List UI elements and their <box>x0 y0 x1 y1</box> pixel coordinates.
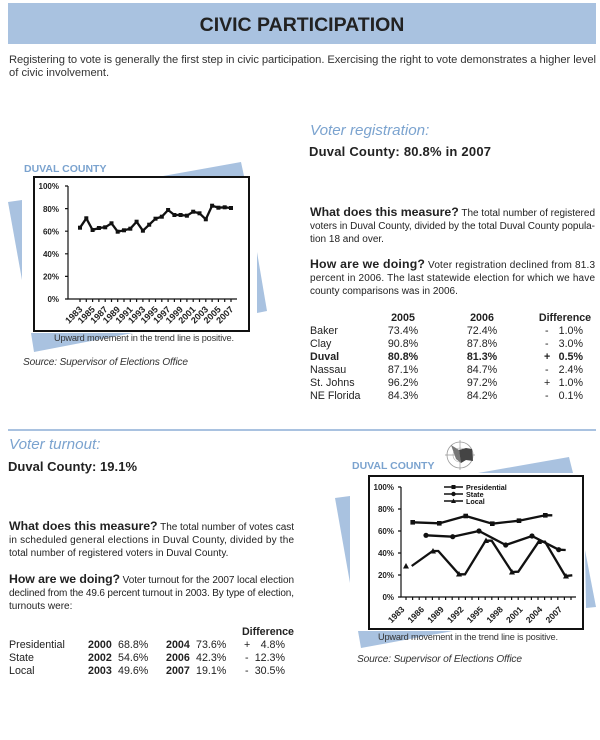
what does this measure <box>9 519 294 559</box>
y axis labels: 60% <box>378 527 394 536</box>
x axis labels: 1997 <box>151 304 173 326</box>
y axis labels: 60% <box>43 228 59 236</box>
registration comparison table: 1.0% <box>559 325 583 337</box>
x axis labels: 1983 <box>386 604 407 625</box>
registration comparison table: 96.2% <box>388 377 419 389</box>
title banner <box>8 3 596 44</box>
registration comparison table: 87.1% <box>388 364 419 376</box>
registration comparison table: 81.3% <box>467 351 498 363</box>
y axis labels: 0% <box>47 295 59 304</box>
registration comparison table: 1.0% <box>559 377 583 389</box>
x axis labels: 2007 <box>543 604 564 625</box>
registration comparison table: 73.4% <box>388 325 419 337</box>
x axis labels <box>63 304 235 326</box>
how are we doing: percent in 2006. The last statewide election for which we have <box>310 273 595 284</box>
title banner: CIVIC PARTICIPATION <box>200 14 404 36</box>
turnout table: 2007 <box>166 665 190 677</box>
chart frame <box>369 476 583 629</box>
registration comparison table: St. Johns <box>310 377 355 389</box>
turnout table: Local <box>9 665 35 677</box>
turnout table: Presidential <box>9 639 65 651</box>
panel: voter turnout text <box>8 436 294 677</box>
registration comparison table: - <box>545 364 549 376</box>
turnout table <box>9 626 294 677</box>
turnout table: 12.3% <box>255 652 285 664</box>
section heading: Voter registration: <box>310 122 429 139</box>
x axis labels: 1986 <box>406 604 426 625</box>
y axis labels: 40% <box>43 250 59 259</box>
turnout table: 54.6% <box>118 652 149 664</box>
registration comparison table: 2005 <box>391 312 415 324</box>
how are we doing: turnouts were: <box>9 601 72 612</box>
chart source: Source: Supervisor of Elections Office <box>23 357 188 368</box>
turnout table: Difference <box>242 626 294 638</box>
turnout table: 68.8% <box>118 639 149 651</box>
turnout table: 2003 <box>88 665 112 677</box>
x axis labels <box>386 604 564 625</box>
turnout table: State <box>9 652 34 664</box>
registration comparison table: 87.8% <box>467 338 498 350</box>
turnout table: 2004 <box>166 639 190 651</box>
registration comparison table: Nassau <box>310 364 346 376</box>
registration comparison table: NE Florida <box>310 390 361 402</box>
registration comparison table: 84.2% <box>467 390 498 402</box>
x axis labels: 2004 <box>524 604 544 625</box>
key figure: Duval County: 19.1% <box>8 459 137 474</box>
local line <box>403 538 572 578</box>
introduction text: of civic involvement. <box>9 67 109 79</box>
y axis labels <box>39 182 59 304</box>
x axis labels: 2005 <box>202 304 223 326</box>
axes <box>398 487 576 600</box>
axes <box>65 186 237 302</box>
panel: voter turnout chart <box>335 440 596 665</box>
key figure: Duval County: 80.8% in 2007 <box>309 144 491 159</box>
x axis labels: 2001 <box>176 304 198 326</box>
registration comparison table: 90.8% <box>388 338 419 350</box>
registration comparison table: - <box>545 325 549 337</box>
state line <box>423 528 566 552</box>
chart caption: Upward movement in the trend line is positive. <box>54 333 234 343</box>
panel: voter registration chart <box>8 162 267 368</box>
how are we doing: county comparisons was in 2006. <box>310 286 458 297</box>
y axis labels: 100% <box>39 182 59 191</box>
turnout table: 2006 <box>166 652 190 664</box>
registration comparison table: 2.4% <box>559 364 583 376</box>
how are we doing: How are we doing? Voter registration declined from 81.3 <box>310 257 595 271</box>
y axis labels: 80% <box>43 205 59 214</box>
what does this measure: What does this measure? The total number of votes cast <box>9 519 294 533</box>
registration comparison table: 0.5% <box>559 351 583 363</box>
legend: State <box>466 490 484 499</box>
x axis labels: 1992 <box>445 604 466 625</box>
registration comparison table: + <box>544 377 550 389</box>
x axis labels: 2007 <box>214 304 235 326</box>
legend <box>444 483 507 506</box>
registration comparison table: 97.2% <box>467 377 498 389</box>
x axis labels: 1991 <box>113 304 135 326</box>
registration comparison table: Duval <box>310 351 339 363</box>
y axis labels: 0% <box>382 593 394 602</box>
registration comparison table: Clay <box>310 338 332 350</box>
turnout table: 49.6% <box>118 665 149 677</box>
x axis labels: 1995 <box>465 604 485 625</box>
registration comparison table: 80.8% <box>388 351 419 363</box>
registration comparison table: + <box>544 351 550 363</box>
turnout table: + <box>244 639 250 651</box>
registration comparison table: 84.3% <box>388 390 419 402</box>
what does this measure: total number of registered voters in Duval County. <box>9 548 228 559</box>
registration comparison table: Baker <box>310 325 338 337</box>
chart heading: DUVAL COUNTY <box>352 460 434 472</box>
what does this measure: voters in Duval County, divided by the total Duval County popula- <box>310 221 595 232</box>
x axis labels: 1993 <box>126 304 147 326</box>
what does this measure: What does this measure? The total number of registered <box>310 205 595 219</box>
introduction text <box>9 54 596 79</box>
registration comparison table: 72.4% <box>467 325 498 337</box>
registration comparison table <box>310 312 591 402</box>
presidential line <box>410 513 552 526</box>
turnout table: - <box>245 652 249 664</box>
turnout table: 73.6% <box>196 639 227 651</box>
what does this measure: tion 18 and over. <box>310 234 384 245</box>
icon: flag on compass <box>445 440 475 470</box>
how are we doing <box>310 257 595 297</box>
x axis labels: 1989 <box>425 604 446 625</box>
registration comparison table: - <box>545 338 549 350</box>
how are we doing: How are we doing? Voter turnout for the 2007 local election <box>9 572 294 586</box>
x axis labels: 2001 <box>504 604 525 625</box>
turnout table: 4.8% <box>261 639 285 651</box>
introduction text: Registering to vote is generally the first step in civic participation. Exercising the right to vote demonstrates a higher level <box>9 54 596 66</box>
registration comparison table: 84.7% <box>467 364 498 376</box>
how are we doing: declined from the 49.6 percent turnout in 2003. By type of election, <box>9 588 294 599</box>
turnout table: 19.1% <box>196 665 227 677</box>
registration comparison table: 3.0% <box>559 338 583 350</box>
y axis labels: 20% <box>43 272 59 282</box>
x axis labels: 1983 <box>63 304 84 326</box>
registration comparison table: 2006 <box>470 312 494 324</box>
what does this measure: in scheduled general elections in Duval County, divided by the <box>9 535 294 546</box>
y axis labels: 100% <box>374 483 394 492</box>
registration comparison table: - <box>545 390 549 402</box>
x axis labels: 1989 <box>101 304 122 326</box>
x axis labels: 1987 <box>88 304 110 326</box>
y axis labels <box>374 483 394 602</box>
what does this measure <box>310 205 595 245</box>
turnout table: 30.5% <box>255 665 285 677</box>
chart source: Source: Supervisor of Elections Office <box>357 654 522 665</box>
chart caption: Upward movement in the trend line is positive. <box>378 632 558 642</box>
chart frame <box>34 177 249 331</box>
turnout table: 42.3% <box>196 652 227 664</box>
chart heading: DUVAL COUNTY <box>24 163 106 175</box>
x axis labels: 1985 <box>76 304 97 326</box>
decorative wedges <box>335 457 596 648</box>
trend line <box>78 204 233 234</box>
how are we doing <box>9 572 294 612</box>
turnout table: 2002 <box>88 652 112 664</box>
registration comparison table: Difference <box>539 312 591 324</box>
x axis labels: 1999 <box>164 304 185 326</box>
legend: Local <box>466 497 485 506</box>
section heading: Voter turnout: <box>9 436 100 453</box>
x axis labels: 1998 <box>484 604 505 625</box>
y axis labels: 20% <box>378 571 394 580</box>
x axis labels: 1995 <box>139 304 160 326</box>
y axis labels: 80% <box>378 505 394 514</box>
y axis labels: 40% <box>378 549 394 558</box>
panel: voter registration text <box>309 122 595 402</box>
turnout table: 2000 <box>88 639 112 651</box>
turnout table: - <box>245 665 249 677</box>
x axis labels: 2003 <box>189 304 210 326</box>
registration comparison table: 0.1% <box>559 390 583 402</box>
legend: Presidential <box>466 483 507 492</box>
decorative wedges <box>8 162 267 352</box>
